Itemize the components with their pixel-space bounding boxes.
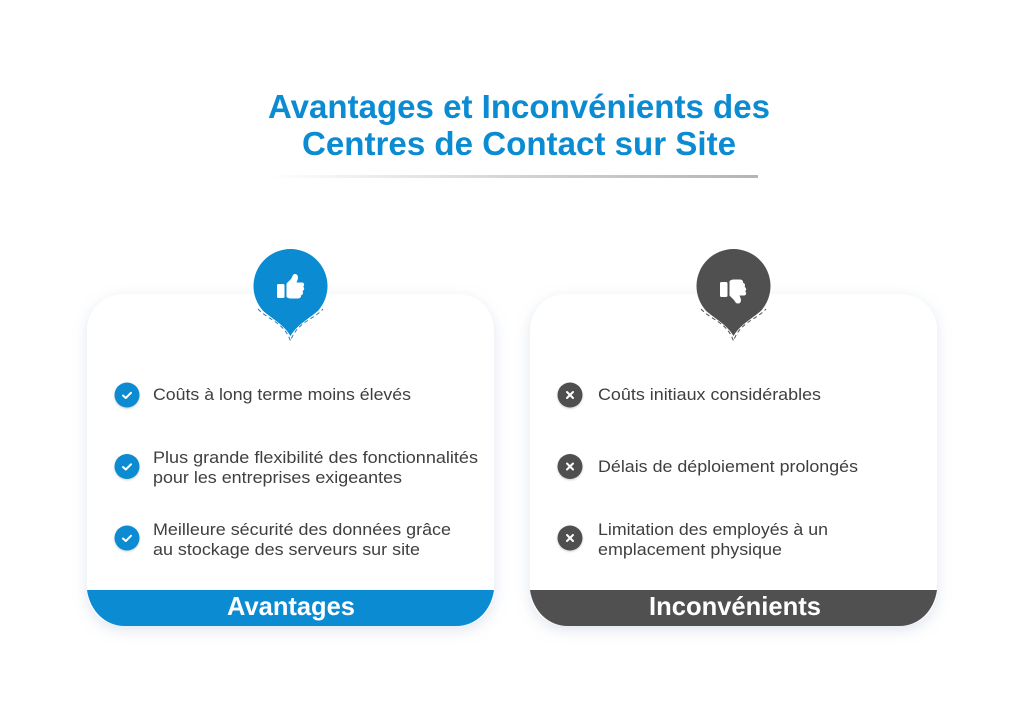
list item: limitation: Limitation des employés à un [598, 520, 828, 539]
list item: coûts à long terme: Coûts à long terme moins élevés [153, 385, 411, 404]
list item: délais [558, 454, 858, 479]
list item: limitation [558, 520, 828, 559]
title [268, 88, 770, 162]
list item: flexibilité: Plus grande flexibilité des fonctionnalités [153, 448, 478, 467]
list item: flexibilité: pour les entreprises exigeantes [153, 468, 402, 487]
footer band: inconvénients [530, 590, 937, 626]
footer band: inconvénients: Inconvénients [649, 591, 821, 621]
list item: coûts initiaux [558, 382, 821, 408]
card background: inconvénients [530, 294, 937, 626]
panel: avantages [87, 249, 494, 626]
list item: flexibilité [114, 448, 478, 487]
list item: sécurité: au stockage des serveurs sur site [153, 540, 420, 559]
list item: coûts initiaux: Coûts initiaux considérables [598, 385, 821, 404]
list item: limitation: emplacement physique [598, 540, 782, 559]
list item: sécurité [114, 520, 451, 559]
footer band: avantages [87, 590, 494, 626]
list item: coûts à long terme [114, 382, 411, 408]
title underline [268, 175, 758, 178]
title: Centres de Contact sur Site [302, 125, 736, 162]
panel: inconvénients [530, 249, 937, 626]
footer band: avantages: Avantages [227, 591, 355, 621]
card background: avantages [87, 294, 494, 626]
icon: thumbs down pin [697, 249, 771, 341]
list item: délais: Délais de déploiement prolongés [598, 457, 858, 476]
title: Avantages et Inconvénients des [268, 88, 770, 125]
list item: sécurité: Meilleure sécurité des données grâce [153, 520, 451, 539]
icon: thumbs up pin [254, 249, 328, 341]
